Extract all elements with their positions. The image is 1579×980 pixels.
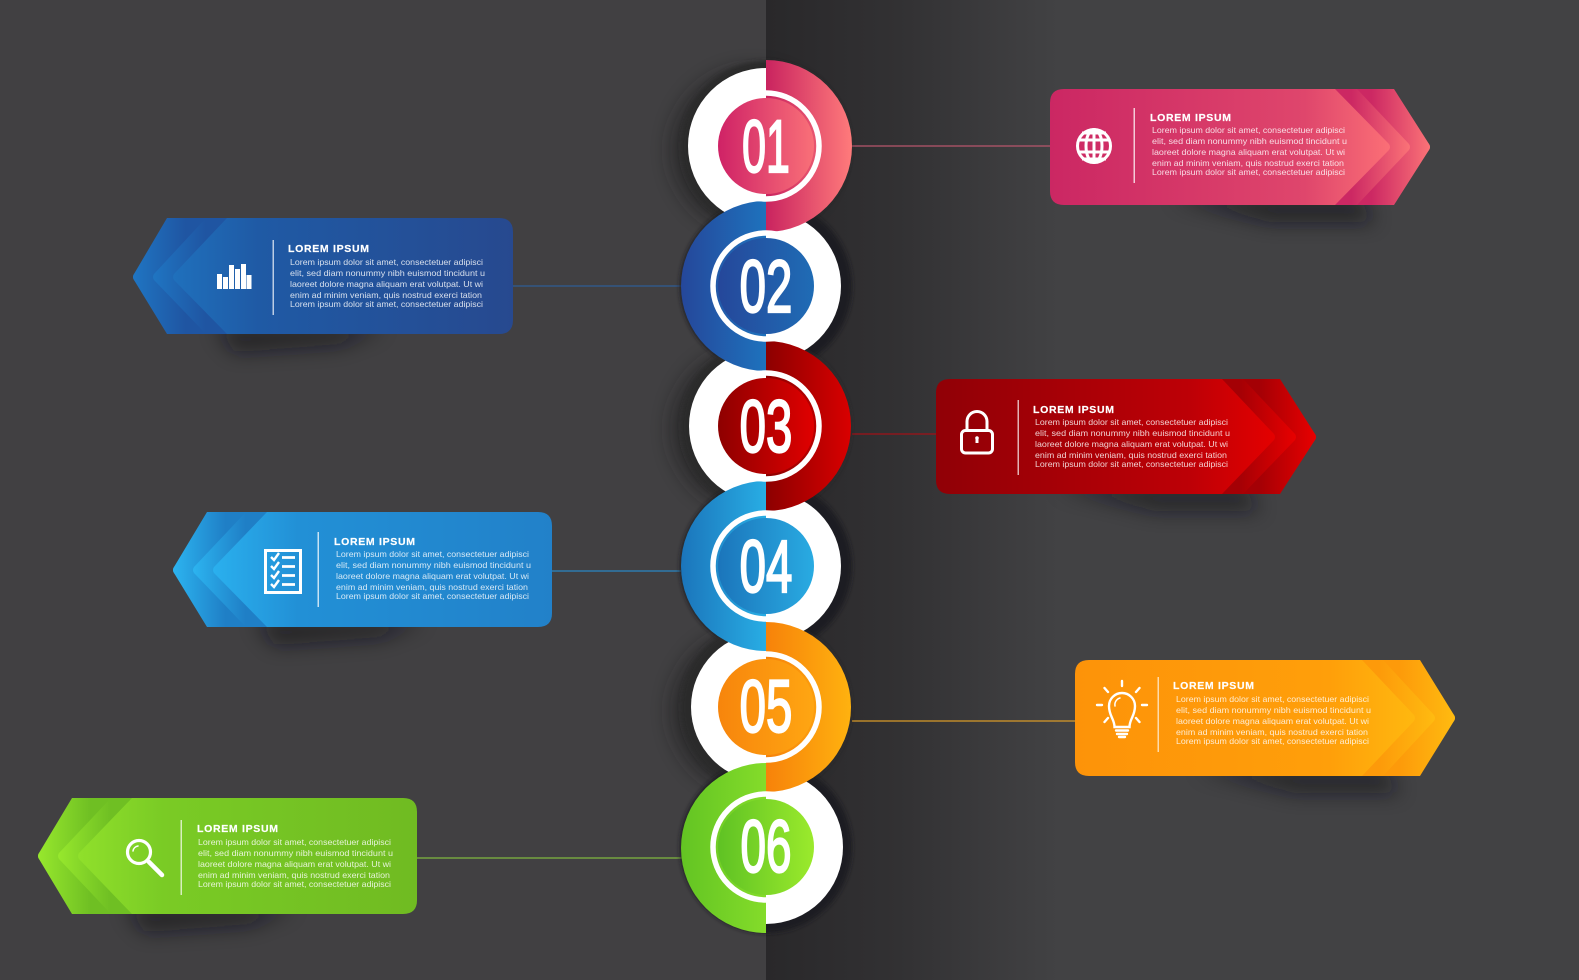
number 01: 01 [742, 105, 790, 188]
icon: checklist [266, 550, 300, 592]
number 05: 05 [740, 666, 792, 749]
icon: padlock [962, 412, 992, 453]
number 04: 04 [740, 526, 792, 609]
body text: enim ad minim veniam, quis nostrud exerci tation [1035, 450, 1227, 460]
body text: enim ad minim veniam, quis nostrud exerci tation [290, 290, 482, 300]
heading: LOREM IPSUM [1033, 404, 1114, 416]
panel: card 04 [173, 512, 552, 645]
body text: enim ad minim veniam, quis nostrud exerci tation [1176, 727, 1368, 737]
panel: card 05 [1075, 660, 1455, 793]
connector lines [417, 146, 1075, 858]
icon: magnifier [128, 840, 162, 875]
body text: Lorem ipsum dolor sit amet, consectetuer adipisci [198, 837, 391, 847]
body text [290, 257, 485, 309]
body text: Lorem ipsum dolor sit amet, consectetuer adipisci [336, 549, 529, 559]
body text: enim ad minim veniam, quis nostrud exerci tation [336, 582, 528, 592]
body text: elit, sed diam nonummy nibh euismod tincidunt u [290, 268, 485, 278]
body text: laoreet dolore magna aliquam erat volutpat. Ut wi [198, 859, 391, 869]
body text [1152, 125, 1347, 177]
body text: Lorem ipsum dolor sit amet, consectetuer adipisci [1035, 417, 1228, 427]
body text: Lorem ipsum dolor sit amet, consectetuer adipisci [290, 299, 483, 309]
white discs [688, 68, 844, 924]
body text: elit, sed diam nonummy nibh euismod tincidunt u [1176, 705, 1371, 715]
body text: Lorem ipsum dolor sit amet, consectetuer adipisci [1152, 125, 1345, 135]
body text: Lorem ipsum dolor sit amet, consectetuer adipisci [198, 879, 391, 889]
number 04 [713, 513, 819, 619]
body text: elit, sed diam nonummy nibh euismod tincidunt u [1035, 428, 1230, 438]
panel: card 02 [133, 218, 513, 352]
body text [336, 549, 531, 601]
body text: Lorem ipsum dolor sit amet, consectetuer adipisci [1176, 694, 1369, 704]
panel: card 03 [936, 379, 1316, 511]
body text: laoreet dolore magna aliquam erat volutpat. Ut wi [1152, 147, 1345, 157]
icon: bar chart [217, 264, 252, 289]
body text: laoreet dolore magna aliquam erat volutpat. Ut wi [1176, 716, 1369, 726]
icon: globe [1078, 129, 1110, 163]
body text: laoreet dolore magna aliquam erat volutpat. Ut wi [1035, 439, 1228, 449]
heading: LOREM IPSUM [1173, 680, 1254, 692]
body text: Lorem ipsum dolor sit amet, consectetuer adipisci [1035, 459, 1228, 469]
body text: Lorem ipsum dolor sit amet, consectetuer adipisci [1176, 736, 1369, 746]
number 02: 02 [740, 246, 792, 329]
icon: light bulb [1097, 681, 1147, 737]
number 06: 06 [740, 806, 792, 889]
number 06 [713, 794, 819, 900]
body text: enim ad minim veniam, quis nostrud exerci tation [198, 870, 390, 880]
number 03: 03 [740, 386, 792, 469]
body text [1035, 417, 1230, 469]
body text: Lorem ipsum dolor sit amet, consectetuer adipisci [336, 591, 529, 601]
body text: laoreet dolore magna aliquam erat volutpat. Ut wi [336, 571, 529, 581]
circle shadows [670, 61, 852, 933]
number 02 [713, 233, 819, 339]
panel: card 01 [1050, 89, 1430, 222]
heading: LOREM IPSUM [288, 243, 369, 255]
body text: elit, sed diam nonummy nibh euismod tincidunt u [198, 848, 393, 858]
body text: elit, sed diam nonummy nibh euismod tincidunt u [1152, 136, 1347, 146]
number 01 [713, 93, 819, 199]
body text: Lorem ipsum dolor sit amet, consectetuer adipisci [1152, 167, 1345, 177]
body text: enim ad minim veniam, quis nostrud exerci tation [1152, 158, 1344, 168]
coloured half circles [681, 60, 852, 933]
number 05 [713, 654, 819, 760]
body text: laoreet dolore magna aliquam erat volutpat. Ut wi [290, 279, 483, 289]
panel: card 06 [38, 798, 417, 932]
body text [1176, 694, 1371, 746]
heading: LOREM IPSUM [1150, 112, 1231, 124]
body text: Lorem ipsum dolor sit amet, consectetuer adipisci [290, 257, 483, 267]
body text: elit, sed diam nonummy nibh euismod tincidunt u [336, 560, 531, 570]
heading: LOREM IPSUM [197, 823, 278, 835]
number 03 [713, 373, 819, 479]
body text [198, 837, 393, 889]
heading: LOREM IPSUM [334, 536, 415, 548]
